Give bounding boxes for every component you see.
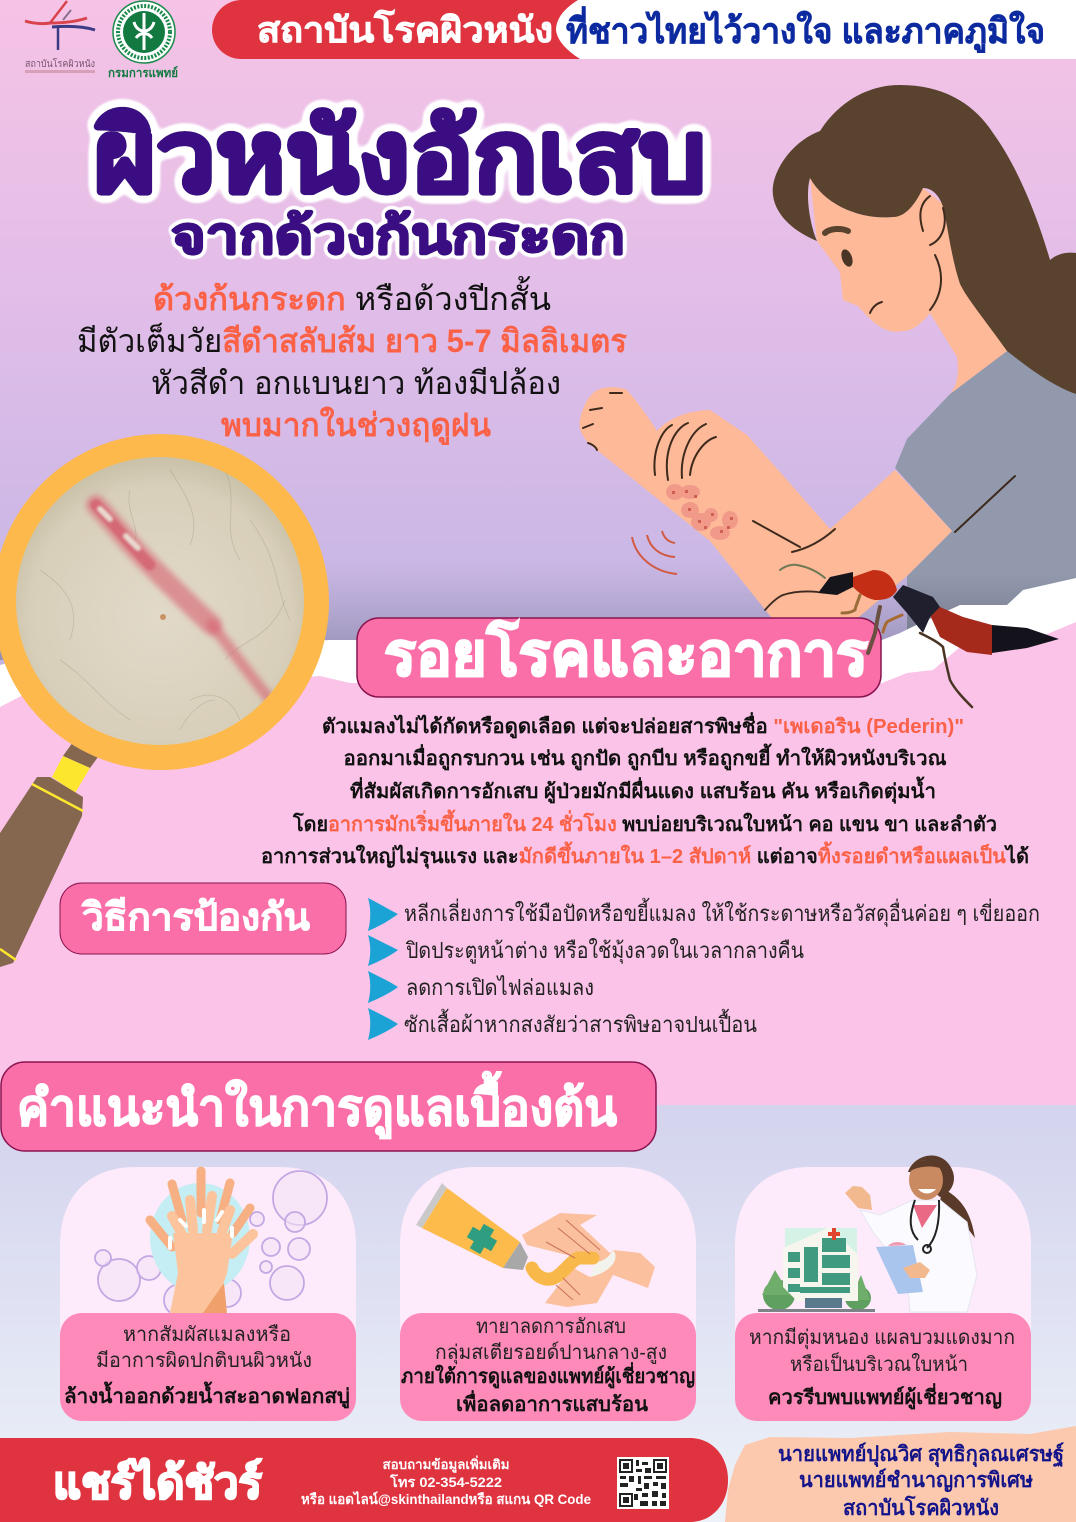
- beetle elytra: [893, 585, 940, 633]
- card 3 caption text: [749, 1327, 1015, 1411]
- beetle abdomen: [930, 607, 992, 655]
- beetle thorax: [853, 570, 897, 600]
- intro line 1: ด้วงก้นกระดก หรือด้วงปีกสั้น: [153, 276, 551, 317]
- doctor clipboard: [876, 1245, 923, 1294]
- icon: soap bubbles: [95, 1171, 327, 1316]
- card 2 caption text: ทายาลดการอักเสบ: [476, 1316, 626, 1338]
- beetle antennae and legs: [765, 565, 972, 707]
- rove beetle photo illustration: [765, 565, 1059, 707]
- card 1: wash hands: [60, 1167, 356, 1421]
- woman: scratch motion arcs: [632, 531, 677, 574]
- card 3 caption text: ควรรีบพบแพทย์ผู้เชี่ยวชาญ: [768, 1382, 1002, 1411]
- background: upper lilac gradient: [0, 0, 1076, 700]
- magnifier rim: [0, 434, 329, 770]
- wrist shadow: [203, 1283, 227, 1313]
- footer contact text: หรือ แอดไลน์@skinthailandหรือ สแกน QR Code: [301, 1490, 591, 1507]
- header banner: [212, 0, 1076, 59]
- section heading: symptoms: รอยโรคและอาการ: [384, 619, 868, 688]
- back hand fingers: [150, 1171, 250, 1247]
- beetle tail: [992, 625, 1059, 653]
- skin hairs: [40, 470, 290, 730]
- card 3 caption panel: [735, 1313, 1031, 1421]
- card 1 caption text: หากสัมผัสแมลงหรือ: [123, 1324, 291, 1346]
- foam flecks: [170, 1210, 232, 1248]
- intro text block: [77, 276, 627, 446]
- bullet arrow 4: [368, 1008, 398, 1040]
- icon: hands with cream: [522, 1213, 655, 1307]
- woman: neck and face: [810, 178, 1007, 394]
- subtitle: จากด้วงก้นกระดก: [171, 208, 625, 264]
- symptoms line 3: ที่สัมผัสเกิดการอักเสบ ผู้ป่วยมักมีผื่นแดง แสบร้อน คัน หรือเกิดตุ่มน้ำ: [350, 776, 936, 805]
- peach brush background: [725, 1426, 1076, 1522]
- bullet text 4: ซักเสื้อผ้าหากสงสัยว่าสารพิษอาจปนเปื้อน: [404, 1009, 757, 1037]
- footer brand text: แชร์ได้ชัวร์: [53, 1457, 262, 1508]
- doctor shirt: [913, 1205, 937, 1228]
- card 3 caption text: หากมีตุ่มหนอง แผลบวมแดงมาก: [749, 1327, 1015, 1350]
- woman: arm and hands: [580, 387, 952, 622]
- icon: hospital building: [758, 1227, 875, 1312]
- magnifier handle: [0, 742, 98, 967]
- woman: shirt: [895, 351, 1076, 660]
- card 3 background: [735, 1167, 1031, 1400]
- bullet text 3: ลดการเปิดไฟล่อแมลง: [406, 975, 594, 1000]
- author name lines: นายแพทย์ปุณวิศ สุทธิกุลณเศรษฐ์: [778, 1442, 1064, 1468]
- symptoms line 1: ตัวแมลงไม่ได้กัดหรือดูดเลือด แต่จะปล่อยสารพิษชื่อ "เพเดอริน (Pederin)": [322, 711, 964, 740]
- magnifying glass with skin photo: [0, 434, 329, 967]
- card 1 caption text: [64, 1324, 350, 1410]
- card 2 caption text: เพื่อลดอาการแสบร้อน: [456, 1389, 648, 1416]
- card 2 caption text: ภายใต้การดูแลของแพทย์ผู้เชี่ยวชาญ: [401, 1361, 695, 1390]
- author credit panel: สถาบันโรคผิวหนัง: [843, 1495, 999, 1520]
- doctor stethoscope: [911, 1200, 939, 1248]
- icon: washing hands: [150, 1171, 253, 1313]
- footer contact text: สอบถามข้อมูลเพิ่มเติม: [382, 1455, 510, 1473]
- front hand fingers: [172, 1196, 253, 1254]
- section heading: prevention: วิธีการป้องกัน: [81, 897, 310, 939]
- card 1 caption panel: [60, 1313, 356, 1421]
- footer contact text: โทร 02-354-5222: [389, 1473, 502, 1490]
- bullet text 2: ปิดประตูหน้าต่าง หรือใช้มุ้งลวดในเวลากลางคืน: [405, 938, 804, 964]
- doctor coat: [860, 1200, 977, 1312]
- card 1 caption text: มีอาการผิดปกติบนผิวหนัง: [96, 1350, 312, 1372]
- logo: Department of Medical Services: กรมการแพทย์: [108, 66, 178, 80]
- doctor hands: [845, 1186, 872, 1210]
- section heading: prevention: [60, 883, 346, 954]
- symptoms paragraph: [261, 711, 1029, 869]
- logo: Institute of Dermatology: [25, 1, 95, 73]
- logo: Institute of Dermatology: สถาบันโรคผิวหนัง: [25, 57, 95, 70]
- section heading: first-aid advice: คำแนะนำในการดูแลเบื้องต้น: [17, 1071, 617, 1139]
- QR code: [617, 1457, 669, 1509]
- doctor ponytail: [940, 1188, 975, 1238]
- woman: face details: [583, 196, 1015, 552]
- background: grey shadow above torn paper: [0, 560, 1076, 660]
- bullet arrow 3: [368, 971, 398, 1003]
- red rash streak: [96, 505, 268, 697]
- logo: Department of Medical Services: [108, 1, 178, 80]
- intro line 2: มีตัวเต็มวัยสีดำสลับส้ม ยาว 5-7 มิลลิเมตร: [77, 322, 627, 359]
- background: middle pink panel with torn edge: [0, 578, 1076, 1110]
- soap foam: [150, 1183, 250, 1293]
- header text: slogan: ที่ชาวไทยไว้วางใจ และภาคภูมิใจ: [566, 6, 1045, 53]
- card 1 background: [60, 1167, 356, 1400]
- symptoms line 2: ออกมาเมื่อถูกรบกวน เช่น ถูกปัด ถูกบีบ หรือถูกขยี้ ทำให้ผิวหนังบริเวณ: [344, 743, 947, 772]
- card 3: see a doctor: [735, 1155, 1031, 1421]
- intro line 3: หัวสีดำ อกแบนยาว ท้องมีปล้อง: [151, 365, 561, 401]
- section heading: first-aid advice: [1, 1062, 656, 1151]
- woman: rash on forearm: [666, 484, 738, 540]
- bullet arrow 1: [368, 898, 398, 931]
- footer banner: [0, 1438, 728, 1522]
- card 1 caption text: ล้างน้ำออกด้วยน้ำสะอาดฟอกสบู่: [64, 1381, 350, 1410]
- icon: ointment tube: [416, 1183, 528, 1270]
- icon: doctor: [845, 1155, 977, 1312]
- symptoms line 5: อาการส่วนใหญ่ไม่รุนแรง และมักดีขึ้นภายใน 1–2 สัปดาห์ แต่อาจทิ้งรอยดำหรือแผลเป็นได้: [261, 841, 1029, 869]
- card 2 caption text: [401, 1316, 695, 1416]
- beetle head: [818, 572, 853, 595]
- doctor head: [908, 1155, 954, 1197]
- background: lower periwinkle gradient: [0, 1105, 1076, 1522]
- intro line 4: พบมากในช่วงฤดูฝน: [221, 406, 491, 446]
- symptoms line 4: โดยอาการมักเริ่มขึ้นภายใน 24 ชั่วโมง พบบ่อยบริเวณใบหน้า คอ แขน ขา และลำตัว: [292, 809, 997, 836]
- header red segment: [212, 0, 600, 59]
- main title: ผิวหนังอักเสบ: [94, 101, 706, 213]
- header text: institute name: สถาบันโรคผิวหนัง: [257, 9, 553, 50]
- illustration: woman scratching arm: [580, 85, 1076, 660]
- main title: [94, 101, 706, 264]
- header white segment: [556, 0, 1076, 59]
- card 3 caption text: หรือเป็นบริเวณใบหน้า: [790, 1351, 968, 1376]
- prevention list: [368, 898, 1040, 1040]
- card 2: apply ointment: [400, 1167, 696, 1421]
- skin photo: [16, 457, 304, 745]
- card 2 background: [400, 1167, 696, 1400]
- author credit panel: [725, 1426, 1076, 1522]
- author credit panel: นายแพทย์ชำนาญการพิเศษ: [799, 1468, 1033, 1493]
- card 2 caption panel: [400, 1313, 696, 1421]
- bullet arrow 2: [368, 935, 398, 966]
- front palm: [170, 1233, 233, 1313]
- woman: hair: [773, 85, 1076, 394]
- card 2 caption text: กลุ่มสเตียรอยด์ปานกลาง-สูง: [435, 1341, 667, 1365]
- footer contact text: [301, 1455, 591, 1507]
